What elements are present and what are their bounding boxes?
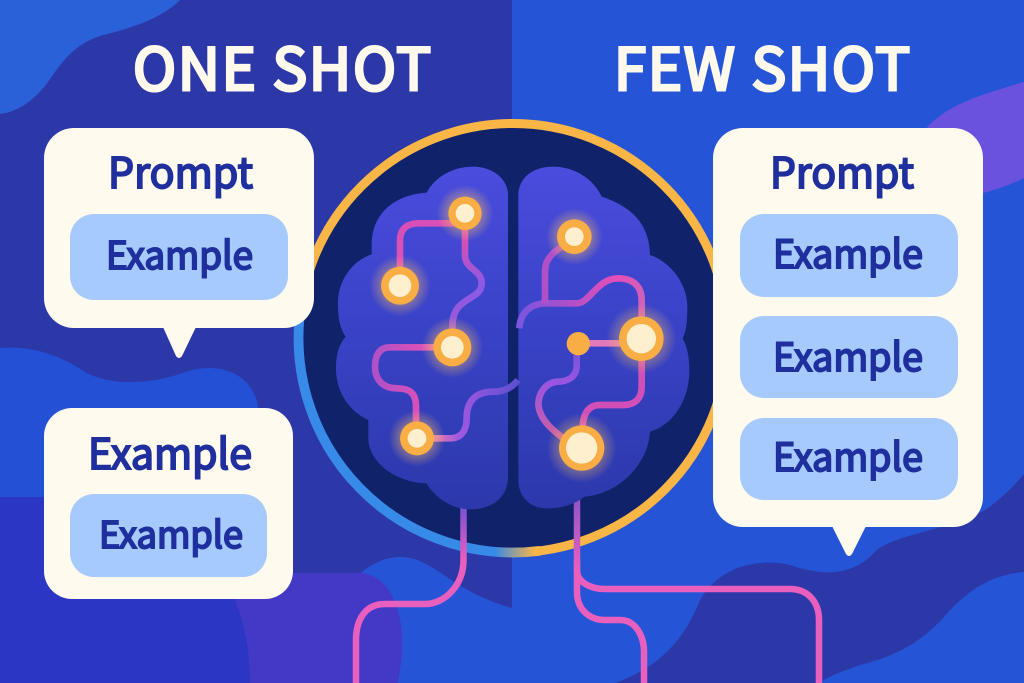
panel: one shot example bubble: Example <box>88 421 252 482</box>
title: one shot: ONE SHOT <box>133 23 431 107</box>
panel: one shot prompt bubble: Example <box>106 225 253 280</box>
brain lobes and circuit, drawn in 3x coordinates <box>336 167 689 509</box>
panel: few shot bubble: Prompt <box>770 140 914 201</box>
brain in circular ring <box>298 124 819 683</box>
right lobe <box>518 167 689 508</box>
glowing nodes <box>369 185 676 483</box>
circuit traces <box>375 213 642 442</box>
bottom connector wires <box>356 480 819 683</box>
panel: one shot example bubble <box>44 408 293 599</box>
ring <box>298 124 728 553</box>
left lobe <box>336 167 508 509</box>
panel: one shot prompt bubble: Prompt <box>108 140 253 201</box>
panel: one shot prompt bubble <box>44 128 314 358</box>
panel: few shot bubble <box>713 128 983 556</box>
panel: few shot bubble: Example <box>773 327 923 383</box>
panel: one shot example bubble: Example <box>99 505 243 559</box>
panel: few shot bubble: Example <box>773 224 923 280</box>
title: few shot: FEW SHOT <box>614 23 910 107</box>
panel: few shot bubble: Example <box>773 427 923 483</box>
